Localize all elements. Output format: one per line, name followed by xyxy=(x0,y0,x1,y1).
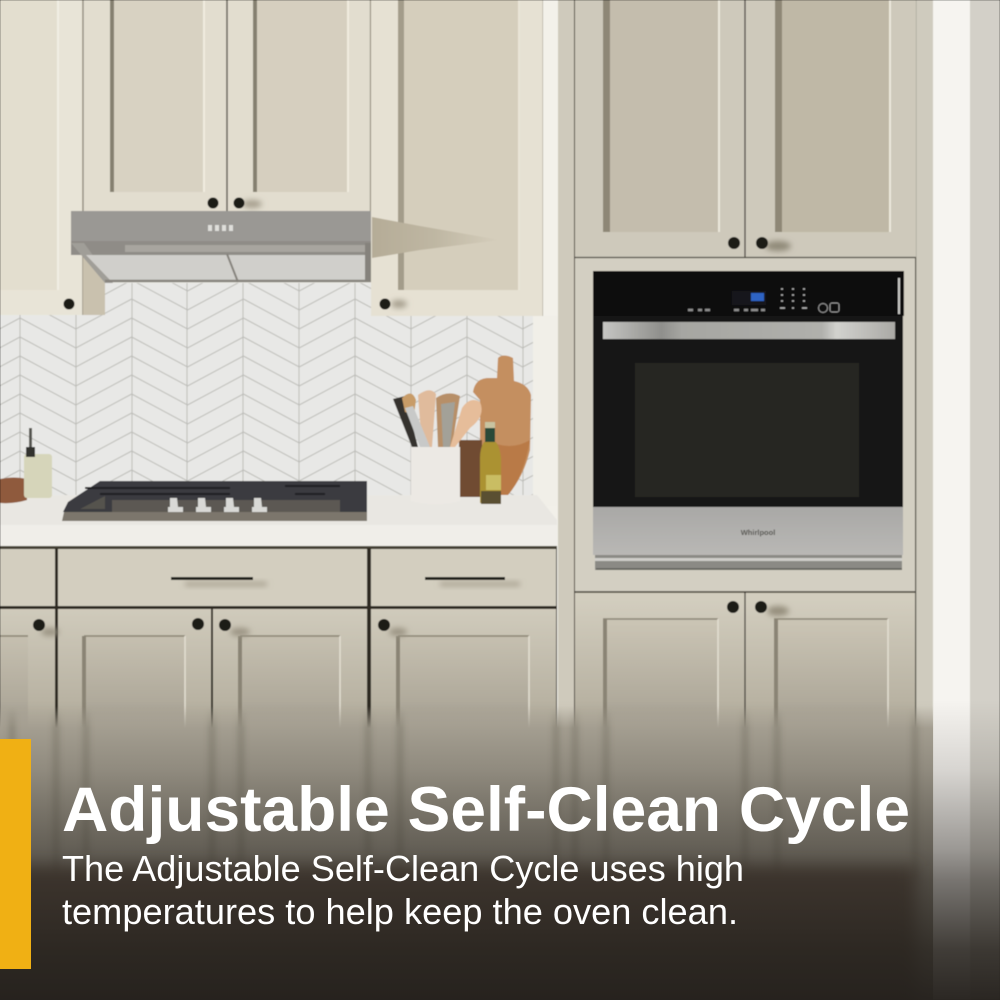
upper cabinet right of hood xyxy=(371,0,543,316)
blurred lower photo area xyxy=(0,700,933,1000)
caption xyxy=(62,775,910,932)
body text: The Adjustable Self-Clean Cycle uses high xyxy=(62,848,744,889)
brand mark: Whirlpool xyxy=(741,528,775,537)
upper oven cabinet doors xyxy=(575,0,916,258)
knob xyxy=(64,298,74,310)
small wood bowl xyxy=(0,478,27,503)
body text xyxy=(62,848,744,932)
range hood xyxy=(71,211,371,283)
dark gradient overlay xyxy=(0,700,1000,1000)
olive oil bottle xyxy=(480,422,501,504)
upper cabinet left xyxy=(0,0,105,315)
oil dispenser xyxy=(24,428,52,498)
oven control panel xyxy=(593,271,904,316)
cutting board xyxy=(459,356,531,497)
heading: Adjustable Self-Clean Cycle xyxy=(62,775,910,845)
utensil crock with utensils xyxy=(393,390,482,504)
drawer pull shadows xyxy=(185,582,520,586)
side column xyxy=(533,0,575,1000)
backsplash: chevron tile xyxy=(0,283,533,508)
steel lower panel xyxy=(593,507,903,555)
yellow accent bar xyxy=(0,739,31,969)
upper cabinets above hood xyxy=(84,0,370,211)
tall cabinet frame xyxy=(575,0,933,1000)
floor xyxy=(31,860,920,946)
base drawers xyxy=(0,548,557,608)
wall oven xyxy=(593,271,904,570)
base cabinet doors xyxy=(0,606,557,1000)
lower tall cabinet doors xyxy=(575,592,915,1000)
oven vent xyxy=(595,555,902,570)
drawer pulls xyxy=(171,577,505,580)
oven handle xyxy=(603,322,895,339)
oven door xyxy=(593,316,903,507)
oven window xyxy=(635,363,859,497)
countertop xyxy=(0,495,557,548)
body text: temperatures to help keep the oven clean. xyxy=(62,891,738,932)
gas cooktop xyxy=(62,481,367,521)
